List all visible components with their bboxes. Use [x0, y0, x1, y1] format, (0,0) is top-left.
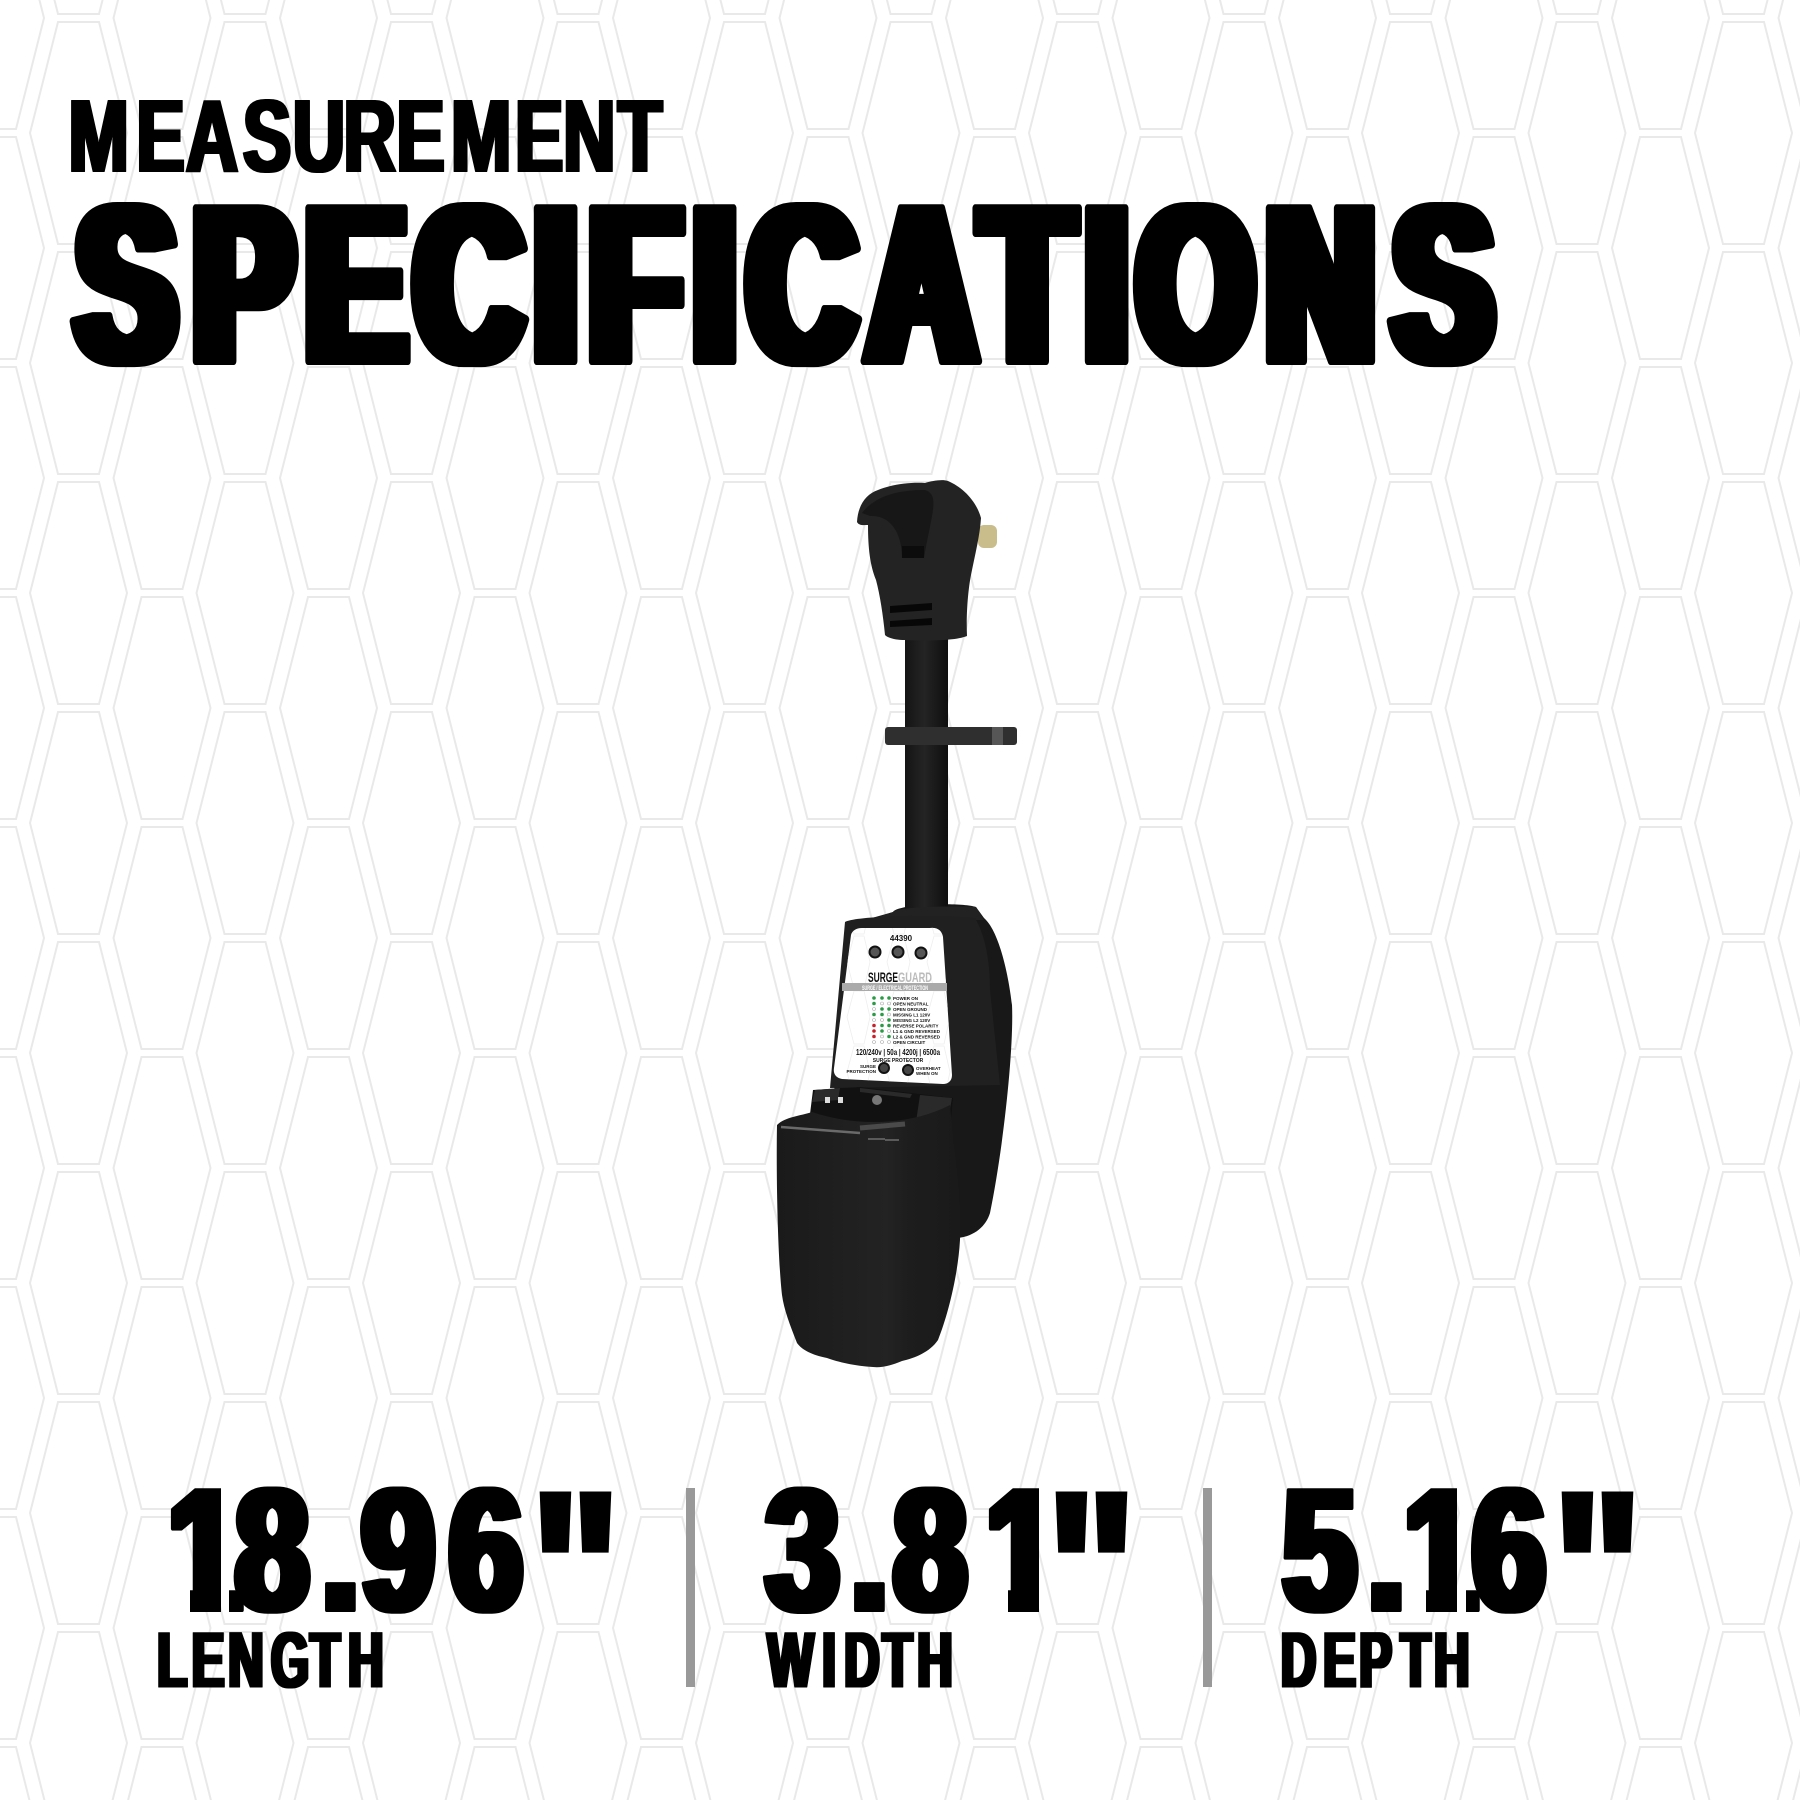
measurements [158, 1486, 1634, 1688]
cover [777, 1105, 960, 1367]
product: surge guard [777, 480, 1017, 1367]
button labels: WHEN ON [916, 1071, 938, 1076]
status legend: REVERSE POLARITY [893, 1024, 939, 1028]
heading: measurement: MEASUREMENT [69, 79, 662, 194]
status legend: MISSING L1 120V [893, 1012, 930, 1018]
status legend: L2 & GND REVERSED [893, 1034, 941, 1040]
plug prong [978, 525, 997, 548]
width [762, 1486, 1128, 1688]
status legend: MISSING L2 120V [893, 1018, 930, 1023]
buttons [879, 1063, 913, 1075]
width: " [1046, 1438, 1137, 1712]
plug head [857, 480, 981, 641]
depth: " [1552, 1438, 1643, 1712]
status legend: OPEN CIRCUIT [893, 1040, 926, 1045]
depth: DEPTH [1281, 1616, 1470, 1704]
depth [1280, 1486, 1634, 1688]
button labels: OVERHEAT [916, 1066, 941, 1071]
status legend: OPEN GROUND [893, 1007, 928, 1012]
button labels: SURGE [860, 1064, 876, 1069]
ratings: 120/240v | 50a | 4200j | 6500a [856, 1047, 940, 1057]
brand: SURGE [868, 969, 898, 985]
hinge [808, 1087, 953, 1130]
front housing [870, 907, 984, 920]
button labels: PROTECTION [846, 1069, 876, 1074]
width: 3.81 [766, 1452, 1059, 1647]
length: " [530, 1438, 621, 1712]
label panel: SURGE PROTECTOR [873, 1058, 924, 1064]
model number: 44390 [890, 934, 913, 943]
depth: 5.16 [1283, 1452, 1546, 1647]
rear housing [833, 904, 1012, 1240]
title [69, 79, 1492, 408]
button labels [846, 1064, 941, 1076]
label panel: SURGE / ELECTRICAL PROTECTION [862, 986, 928, 992]
label panel [834, 928, 952, 1084]
status legend: L1 & GND REVERSED [893, 1029, 941, 1034]
length: 18.96 [168, 1452, 523, 1647]
divider [1203, 1488, 1212, 1687]
indicator lights [870, 946, 926, 958]
heading: specifications: SPECIFICATIONS [77, 160, 1492, 408]
length: LENGTH [157, 1616, 384, 1704]
divider [686, 1488, 695, 1687]
length [158, 1486, 612, 1688]
cord [905, 636, 948, 912]
status legend: POWER ON [893, 996, 918, 1001]
width: WIDTH [768, 1616, 953, 1704]
status legend [872, 996, 941, 1045]
status legend: OPEN NEUTRAL [893, 1002, 929, 1006]
label panel: GUARD [898, 969, 932, 985]
cord band [885, 727, 1017, 745]
